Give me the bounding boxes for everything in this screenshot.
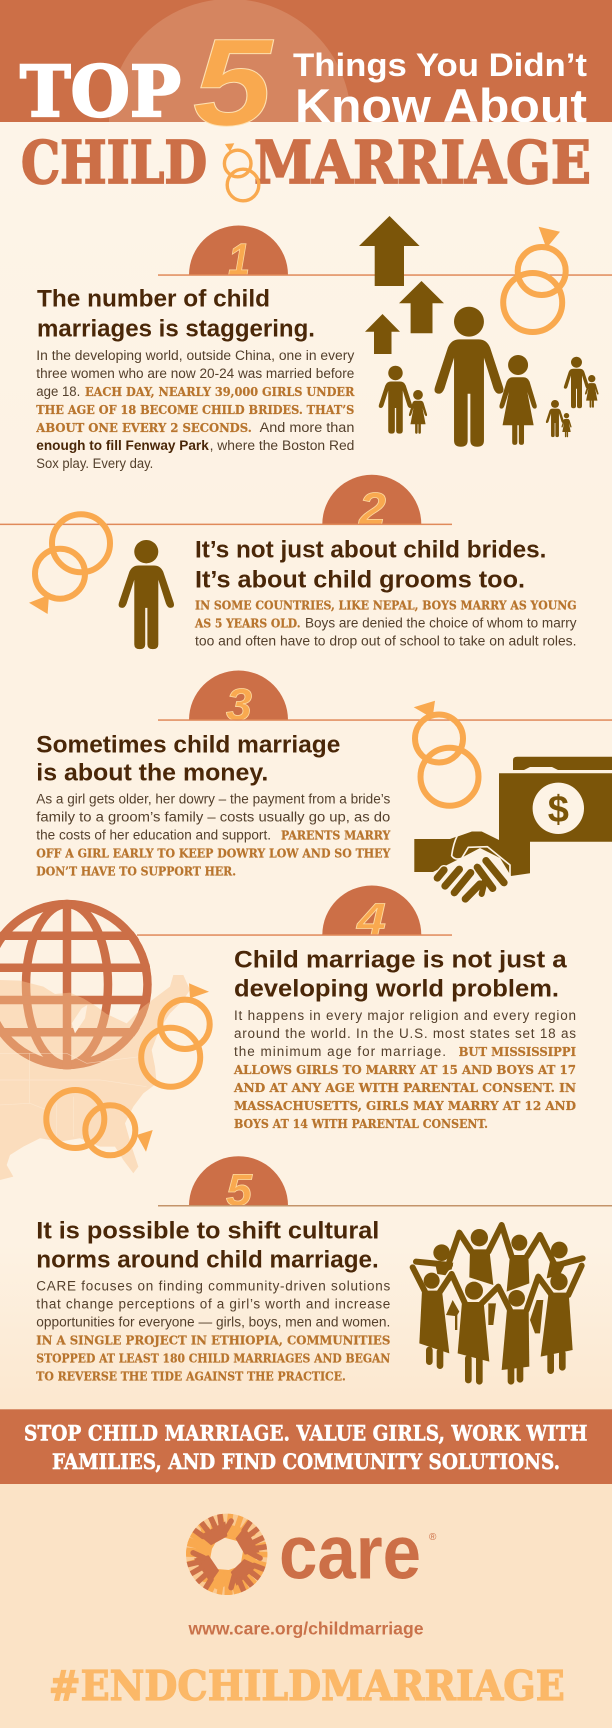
panel: fact 3 [36, 670, 612, 899]
icon: lower rings [46, 1090, 153, 1155]
icon: boy [119, 540, 174, 649]
header title: Things You Didn’t [293, 47, 587, 83]
heading 2: It’s not just about child brides. [195, 536, 546, 563]
heading 4 [234, 946, 567, 1003]
number badge 5 [158, 1156, 612, 1216]
body text 2: Boys are denied the choice of whom to marry [305, 615, 577, 630]
body text 5: CARE focuses on finding community-driven solutions [36, 1279, 391, 1294]
header title: CHILD [21, 128, 207, 197]
body text 3 [36, 791, 391, 878]
heading 2 [195, 536, 546, 593]
body text 2: AS 5 YEARS OLD. [194, 616, 300, 630]
icon: rising arrows [359, 216, 444, 354]
body text 4: around the world. In the U.S. most states set 18 as [234, 1026, 576, 1041]
icon: families [379, 307, 599, 447]
logo wordmark: ® [429, 1532, 437, 1543]
heading 1: marriages is staggering. [37, 316, 315, 343]
website url: www.care.org/childmarriage [187, 1618, 424, 1638]
heading 1 [37, 286, 315, 343]
body text 4: BOYS AT 14 WITH PARENTAL CONSENT. [234, 1117, 488, 1131]
body text 1: EACH DAY, NEARLY 39,000 GIRLS UNDER [85, 385, 355, 399]
map of eastern United States [0, 975, 190, 1180]
heading 5: norms around child marriage. [36, 1247, 379, 1274]
body text 4: BUT MISSISSIPPI [459, 1045, 576, 1059]
heading 3 [36, 732, 340, 787]
icon: money and handshake: $ [548, 789, 569, 831]
call-to-action banner [0, 1409, 612, 1484]
body text 1: And more than [260, 420, 354, 435]
heading 1: The number of child [37, 286, 270, 313]
body text 1: enough to fill Fenway Park [36, 438, 209, 453]
number badge 4: 4 [356, 894, 386, 945]
body text 2: IN SOME COUNTRIES, LIKE NEPAL, BOYS MARRY AS YOUNG [195, 598, 576, 612]
number badge 1 [158, 225, 612, 285]
hashtag: #ENDCHILDMARRIAGE [49, 1662, 565, 1710]
body text 1: three women who are now 20-24 was married before [36, 366, 354, 381]
body text 1: age 18. [36, 384, 80, 399]
body text 2: too and often have to drop out of school to take on adult roles. [195, 633, 576, 648]
heading 3: Sometimes child marriage [36, 732, 340, 759]
icon: rings [29, 514, 110, 614]
panel: fact 2 [0, 475, 577, 649]
body text 5: TO REVERSE THE TIDE AGAINST THE PRACTICE. [36, 1370, 346, 1384]
body text 4 [233, 1008, 576, 1131]
icon: rings [414, 701, 478, 806]
body text 5: opportunities for everyone — girls, boys, men and women. [36, 1315, 390, 1330]
heading 5: It is possible to shift cultural [36, 1217, 379, 1244]
body text 3: OFF A GIRL EARLY TO KEEP DOWRY LOW AND SO THEY [36, 846, 391, 860]
body text 1: THE AGE OF 18 BECOME CHILD BRIDES. THAT’S [36, 403, 354, 417]
body text 5: that change perceptions of a girl’s worth and increase [36, 1297, 390, 1312]
body text 3: PARENTS MARRY [281, 828, 391, 842]
panel: fact 5 [36, 1156, 612, 1384]
number badge 1: 1 [228, 234, 250, 285]
heading 5 [36, 1217, 379, 1274]
body text 5: IN A SINGLE PROJECT IN ETHIOPIA, COMMUNITIES [36, 1334, 390, 1348]
panel: fact 1 [35, 216, 612, 471]
icon: money and handshake [414, 757, 612, 899]
body text 1: In the developing world, outside China, one in every [36, 348, 355, 363]
body text 4: It happens in every major religion and every region [234, 1008, 576, 1023]
body text 4: the minimum age for marriage. [234, 1044, 446, 1059]
logo: CARE hands emblem [186, 1514, 268, 1595]
panel: fact 4 [0, 886, 576, 1180]
logo wordmark: care [279, 1510, 421, 1595]
number badge 3: 3 [226, 679, 252, 730]
number badge 4 [137, 886, 452, 945]
body text 5 [36, 1279, 391, 1384]
body text 1 [35, 348, 355, 471]
body text 3: As a girl gets older, her dowry – the payment from a bride’s [36, 791, 391, 806]
body text 5: STOPPED AT LEAST 180 CHILD MARRIAGES AND BEGAN [36, 1352, 390, 1366]
heading 2: It’s about child grooms too. [195, 566, 525, 593]
body text 3: the costs of her education and support. [36, 827, 271, 842]
body text 3: DON’T HAVE TO SUPPORT HER. [36, 864, 236, 878]
number badge 2: 2 [358, 483, 386, 534]
body text 3: family to a groom’s family – costs usually go up, as do [36, 809, 390, 824]
body text 4: AND AT ANY AGE WITH PARENTAL CONSENT. IN [233, 1081, 576, 1095]
header title: 5 [193, 14, 274, 152]
body text 2 [194, 598, 577, 648]
body text 1: , where the Boston Red [210, 438, 354, 453]
heading 3: is about the money. [36, 760, 268, 787]
icon: group of women with raised hands [413, 1225, 583, 1381]
body text 4: MASSACHUSETTS, GIRLS MAY MARRY AT 12 AND [234, 1099, 576, 1113]
number badge 2 [0, 475, 452, 534]
icon: small wedding rings in title [224, 143, 259, 201]
header title [0, 0, 612, 185]
heading 4: Child marriage is not just a [234, 946, 567, 973]
body text 1: ABOUT ONE EVERY 2 SECONDS. [35, 421, 252, 435]
header title: Know About [295, 79, 587, 132]
body text 4: ALLOWS GIRLS TO MARRY AT 15 AND BOYS AT 17 [233, 1063, 576, 1077]
number badge 3 [158, 670, 612, 730]
icon: rings [503, 227, 566, 332]
heading 4: developing world problem. [234, 976, 559, 1003]
number badge 5: 5 [226, 1165, 253, 1216]
body text 1: Sox play. Every day. [36, 456, 153, 471]
icon: globe [0, 900, 150, 1070]
icon: upper rings [141, 983, 210, 1087]
header title: TOP [20, 50, 181, 133]
